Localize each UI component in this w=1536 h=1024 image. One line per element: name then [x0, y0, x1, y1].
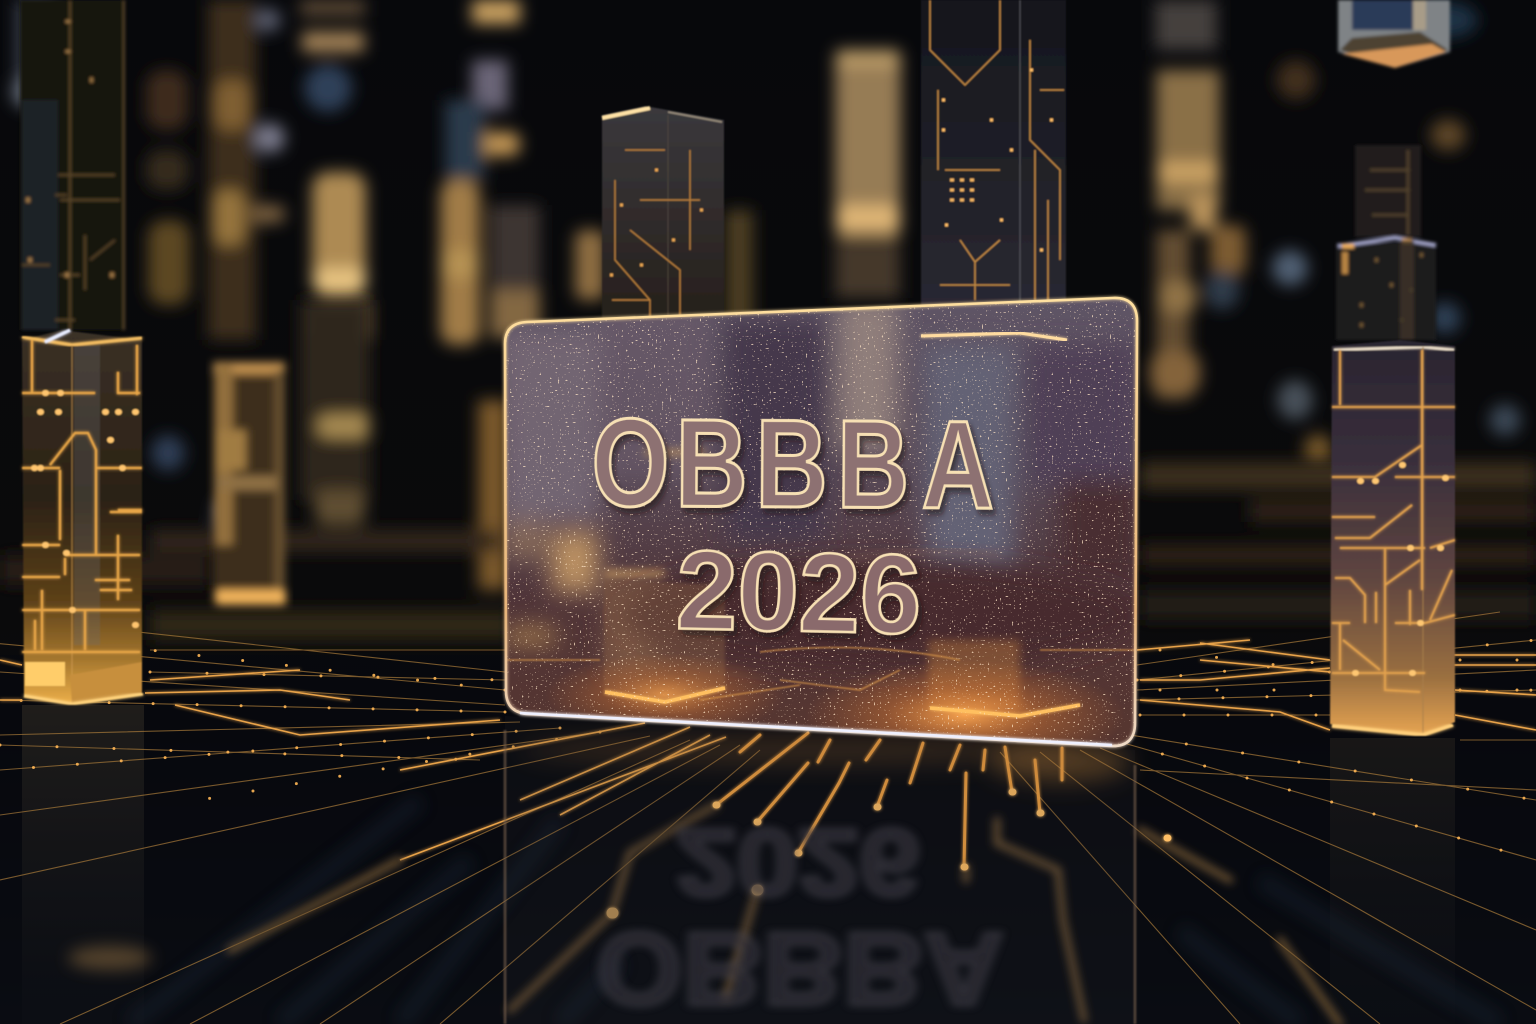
left foreground tower: [22, 330, 143, 705]
title OBBBA: B: [675, 394, 748, 533]
tower reflections: [22, 705, 1455, 1024]
blurred background towers: [12, 0, 1521, 466]
reflected title: OBBBA: [596, 911, 1004, 1024]
blurred mid tower with glowing base: [213, 362, 286, 605]
back left tower: [20, 0, 125, 330]
top right box tower: [1338, 0, 1450, 68]
right foreground tower: [1330, 340, 1455, 736]
title 2026: 2026: [675, 527, 923, 658]
floor node dots: [0, 640, 1536, 860]
circuit floor: [0, 612, 1536, 1024]
dim lower traces: [230, 805, 1340, 1024]
blue bottom streaks: [130, 800, 1500, 1024]
title OBBBA: A: [921, 395, 995, 535]
card border: [505, 298, 1137, 746]
floor nodes: [612, 792, 1168, 913]
floor glow spots: [68, 734, 1130, 970]
tall dark center tower: [921, 0, 1066, 340]
fine radial floor traces: [0, 612, 1536, 1024]
title OBBBA: O: [591, 393, 670, 533]
bright floor traces: [0, 640, 1536, 860]
dim mid right back towers: [1336, 145, 1436, 340]
reflected title: 2026: [676, 808, 921, 915]
card bottom highlight: [520, 713, 1112, 745]
title OBBBA: B: [755, 394, 828, 534]
card see-through background: [500, 298, 1140, 770]
center back tower: [602, 106, 724, 340]
card dust speckle: [505, 298, 1137, 748]
thick bright fan traces: [716, 733, 1062, 867]
reflected title: [596, 808, 1004, 1024]
see-through tower highlight: [921, 333, 1067, 340]
glass card: [500, 298, 1140, 770]
card panel: [505, 298, 1137, 746]
see-through tower inside card: [604, 580, 725, 700]
title OBBBA: B: [837, 395, 910, 534]
card floor reflection: [505, 716, 1135, 1024]
blurred lower towers and haze: [0, 300, 1536, 640]
